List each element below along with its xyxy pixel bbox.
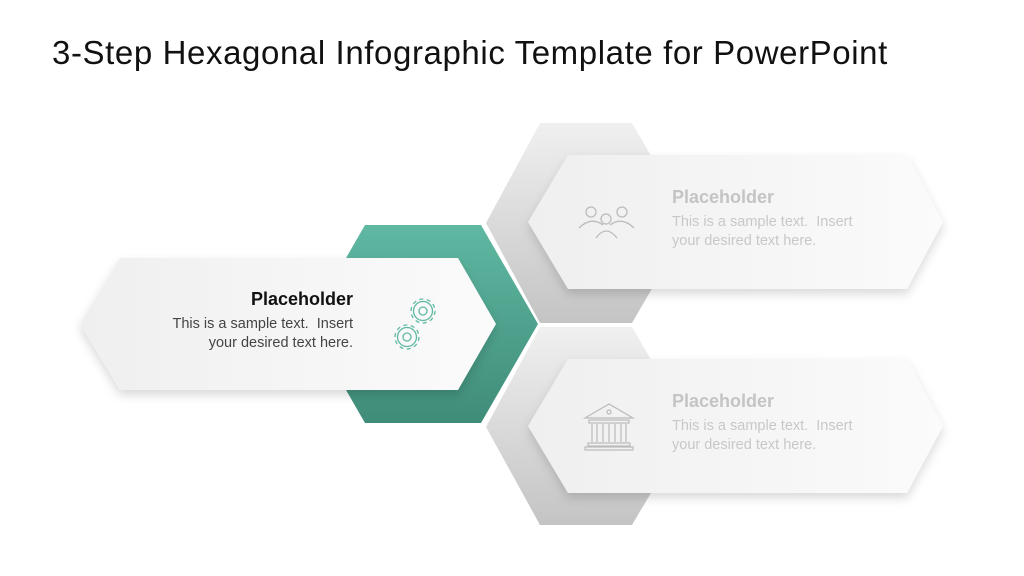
icon: building (585, 404, 633, 450)
banner: step 3 (528, 359, 943, 493)
banner: step 2 (528, 155, 943, 289)
text: step 2 (672, 187, 853, 249)
text: step 3 (672, 391, 853, 453)
text: step 2: your desired text here. (672, 233, 816, 249)
icon: gears (395, 299, 435, 349)
text: step 1: Placeholder (251, 289, 353, 309)
text: step 1 (172, 289, 353, 351)
hexagon: green (308, 225, 538, 423)
text: step 3: your desired text here. (672, 437, 816, 453)
text: step 3: Placeholder (672, 391, 774, 411)
text: step 2: Placeholder (672, 187, 774, 207)
hexagon: gray top (486, 123, 690, 323)
icon: people (579, 207, 634, 238)
text: step 1: This is a sample text. Insert (172, 316, 353, 332)
text: step 1: your desired text here. (209, 335, 353, 351)
text: step 2: This is a sample text. Insert (672, 214, 853, 230)
title: 3-Step Hexagonal Infographic Template for PowerPoint (52, 34, 888, 71)
hexagon: gray bottom (486, 327, 690, 525)
text: step 3: This is a sample text. Insert (672, 418, 853, 434)
banner: step 1 (80, 258, 496, 390)
